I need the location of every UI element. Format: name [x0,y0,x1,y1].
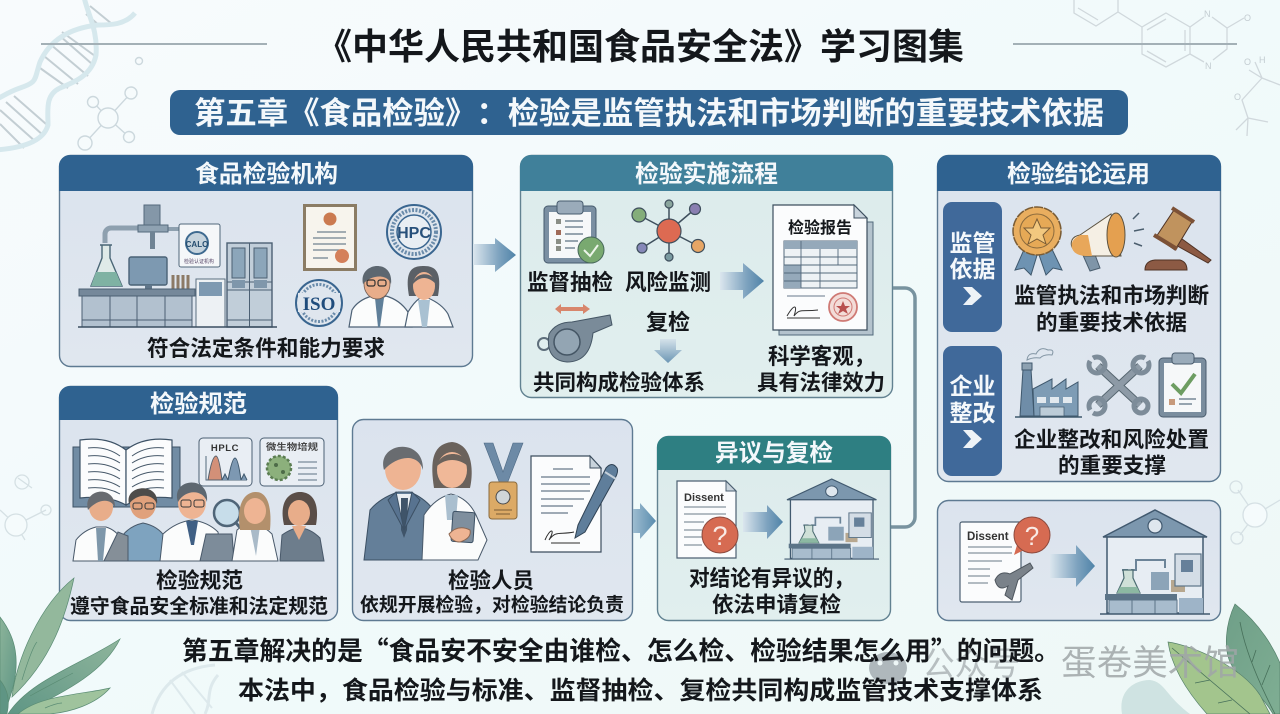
decoration: chemical structure top right: H [1259,55,1266,65]
decoration: molecule right middle [1230,481,1280,544]
heading: 检验规范 [150,390,247,418]
decoration: DNA helix top left [0,0,135,150]
icon: lanyard badge [484,443,523,519]
watermark: publisher name: 蛋卷美术馆 [1061,644,1239,683]
icon: laboratory bench: 检验认证机构 [184,258,214,265]
header rule left [41,43,267,45]
panel: 检验实施流程 [520,155,893,398]
decoration: molecule left middle [0,475,51,540]
caption: 检验规范 [156,568,243,593]
panel: 复检图示 [938,500,1220,620]
decoration: chemical structure top right: O [1244,57,1251,67]
arrow [654,339,682,363]
icon: ISO stamp: ISO [303,294,335,315]
panel header [59,155,473,191]
heading: 食品检验机构 [195,160,338,188]
icon: signed document and pen [531,456,618,552]
tab: 监管依据: 监管 [950,230,996,256]
icon: laboratory bench [78,205,277,327]
summary line 1: 第五章解决的是“食品安不安全由谁检、怎么检、检验结果怎么用”的问题。 [182,631,1060,668]
icon: dissent document [677,481,738,558]
caption: 科学客观， [768,344,875,369]
decoration: leaves bottom left [0,578,120,714]
icon: HPC stamp: HPC [397,225,431,242]
header rule right [1013,43,1237,45]
summary line 2: 本法中，食品检验与标准、监督抽检、复检共同构成监管技术支撑体系 [238,676,1043,705]
icon: inspection clipboard [544,201,604,263]
caption: 企业整改和风险处置 [1014,427,1209,452]
arrow [1050,545,1095,587]
icon: HPLC card: HPLC [211,443,239,454]
label: 复检 [646,310,690,335]
panel header [937,155,1221,191]
icon: HPC stamp [387,205,441,259]
icon: checklist clipboard [1159,353,1206,417]
tab: 监管依据: 依据 [950,256,996,282]
decoration: chemical structure top right: O [1234,92,1241,102]
panel header [657,436,891,470]
decoration: chemical structure top right [1074,0,1280,136]
subtitle banner: 第五章《食品检验》：检验是监管执法和市场判断的重要技术依据 [194,96,1104,131]
decoration: chemical structure top right: N [1205,61,1212,71]
decoration: DNA lower centre [152,665,218,714]
title: 《中华人民共和国食品安全法》学习图集 [316,26,964,67]
icon: whistle [538,304,612,362]
icon: microbe culture card [260,438,324,486]
heading: 检验实施流程 [635,160,778,188]
panel: 食品检验机构 [59,155,473,366]
icon: dissent document with seal tool: Dissent [967,531,1009,543]
icon: dissent document: ? [712,521,728,551]
decoration: molecule top left [78,58,142,150]
heading: 异议与复检 [715,439,833,467]
panel: 检验人员 [352,420,632,620]
caption: 的重要技术依据 [1036,311,1187,335]
caption: 符合法定条件和能力要求 [147,336,385,361]
decoration: chemical structure top right: N [1204,9,1210,19]
icon: medal [1013,207,1062,275]
label: 风险监测 [625,270,711,295]
watermark: wechat official account: 公众号 [922,645,1020,682]
tab: 监管依据 [943,202,1002,332]
caption: 依规开展检验，对检验结论负责 [360,593,624,616]
icon: inspection report: 检验报告 [788,218,852,237]
icon: two inspectors [349,266,453,327]
icon: crossed wrenches [1085,353,1153,418]
panel header [520,155,893,191]
icon: man in suit [364,447,438,560]
caption: 的重要支撑 [1058,454,1166,478]
caption: 共同构成检验体系 [533,370,705,395]
tab: 企业整改: 企业 [950,373,996,399]
icon: gavel [1145,208,1211,270]
icon: HPLC card [199,438,252,486]
arrow [720,263,764,299]
caption: 依法申请复检 [712,592,841,617]
panel: 检验规范 [59,386,338,620]
arrow: personnel to recheck [633,503,656,539]
connector: process to recheck [891,288,915,527]
icon: dissent document with seal tool: ? [1025,521,1039,551]
tab: 企业整改: 整改 [950,400,996,426]
icon: microbe culture card: 微生物培规 [266,441,318,452]
panel: 异议与复检 [657,436,891,620]
heading: 检验结论运用 [1007,160,1150,188]
decoration: leaves bottom right [1121,604,1280,714]
arrow [743,505,783,539]
caption: 监管执法和市场判断 [1014,283,1209,308]
decoration: chemical structure top right: O [1244,13,1251,23]
caption: 遵守食品安全标准和法定规范 [70,594,328,618]
icon: laboratory building [784,479,879,559]
icon: open book [73,439,180,507]
panel: 检验结论运用 [937,155,1221,482]
icon: certificate [303,204,357,271]
icon: ISO stamp [296,280,342,326]
icon: five inspectors [73,482,324,561]
icon: dissent document: Dissent [684,492,724,504]
watermark: wechat official account [869,645,1020,684]
icon: inspection report [773,205,873,335]
icon: risk network [632,200,704,261]
icon: woman in lab coat [422,442,487,560]
label: 监督抽检 [527,270,613,295]
icon: factory [1015,349,1082,417]
caption: 具有法律效力 [757,371,885,395]
icon: laboratory building [1100,510,1210,614]
caption: 检验人员 [448,568,534,593]
panel header [59,386,338,420]
caption: 对结论有异议的， [689,566,854,591]
icon: megaphone [1071,213,1144,271]
icon: dissent document with seal tool [960,517,1050,602]
tab: 企业整改 [943,346,1002,476]
arrow: institution to process [473,238,516,272]
icon: laboratory bench: CALO [186,240,208,249]
